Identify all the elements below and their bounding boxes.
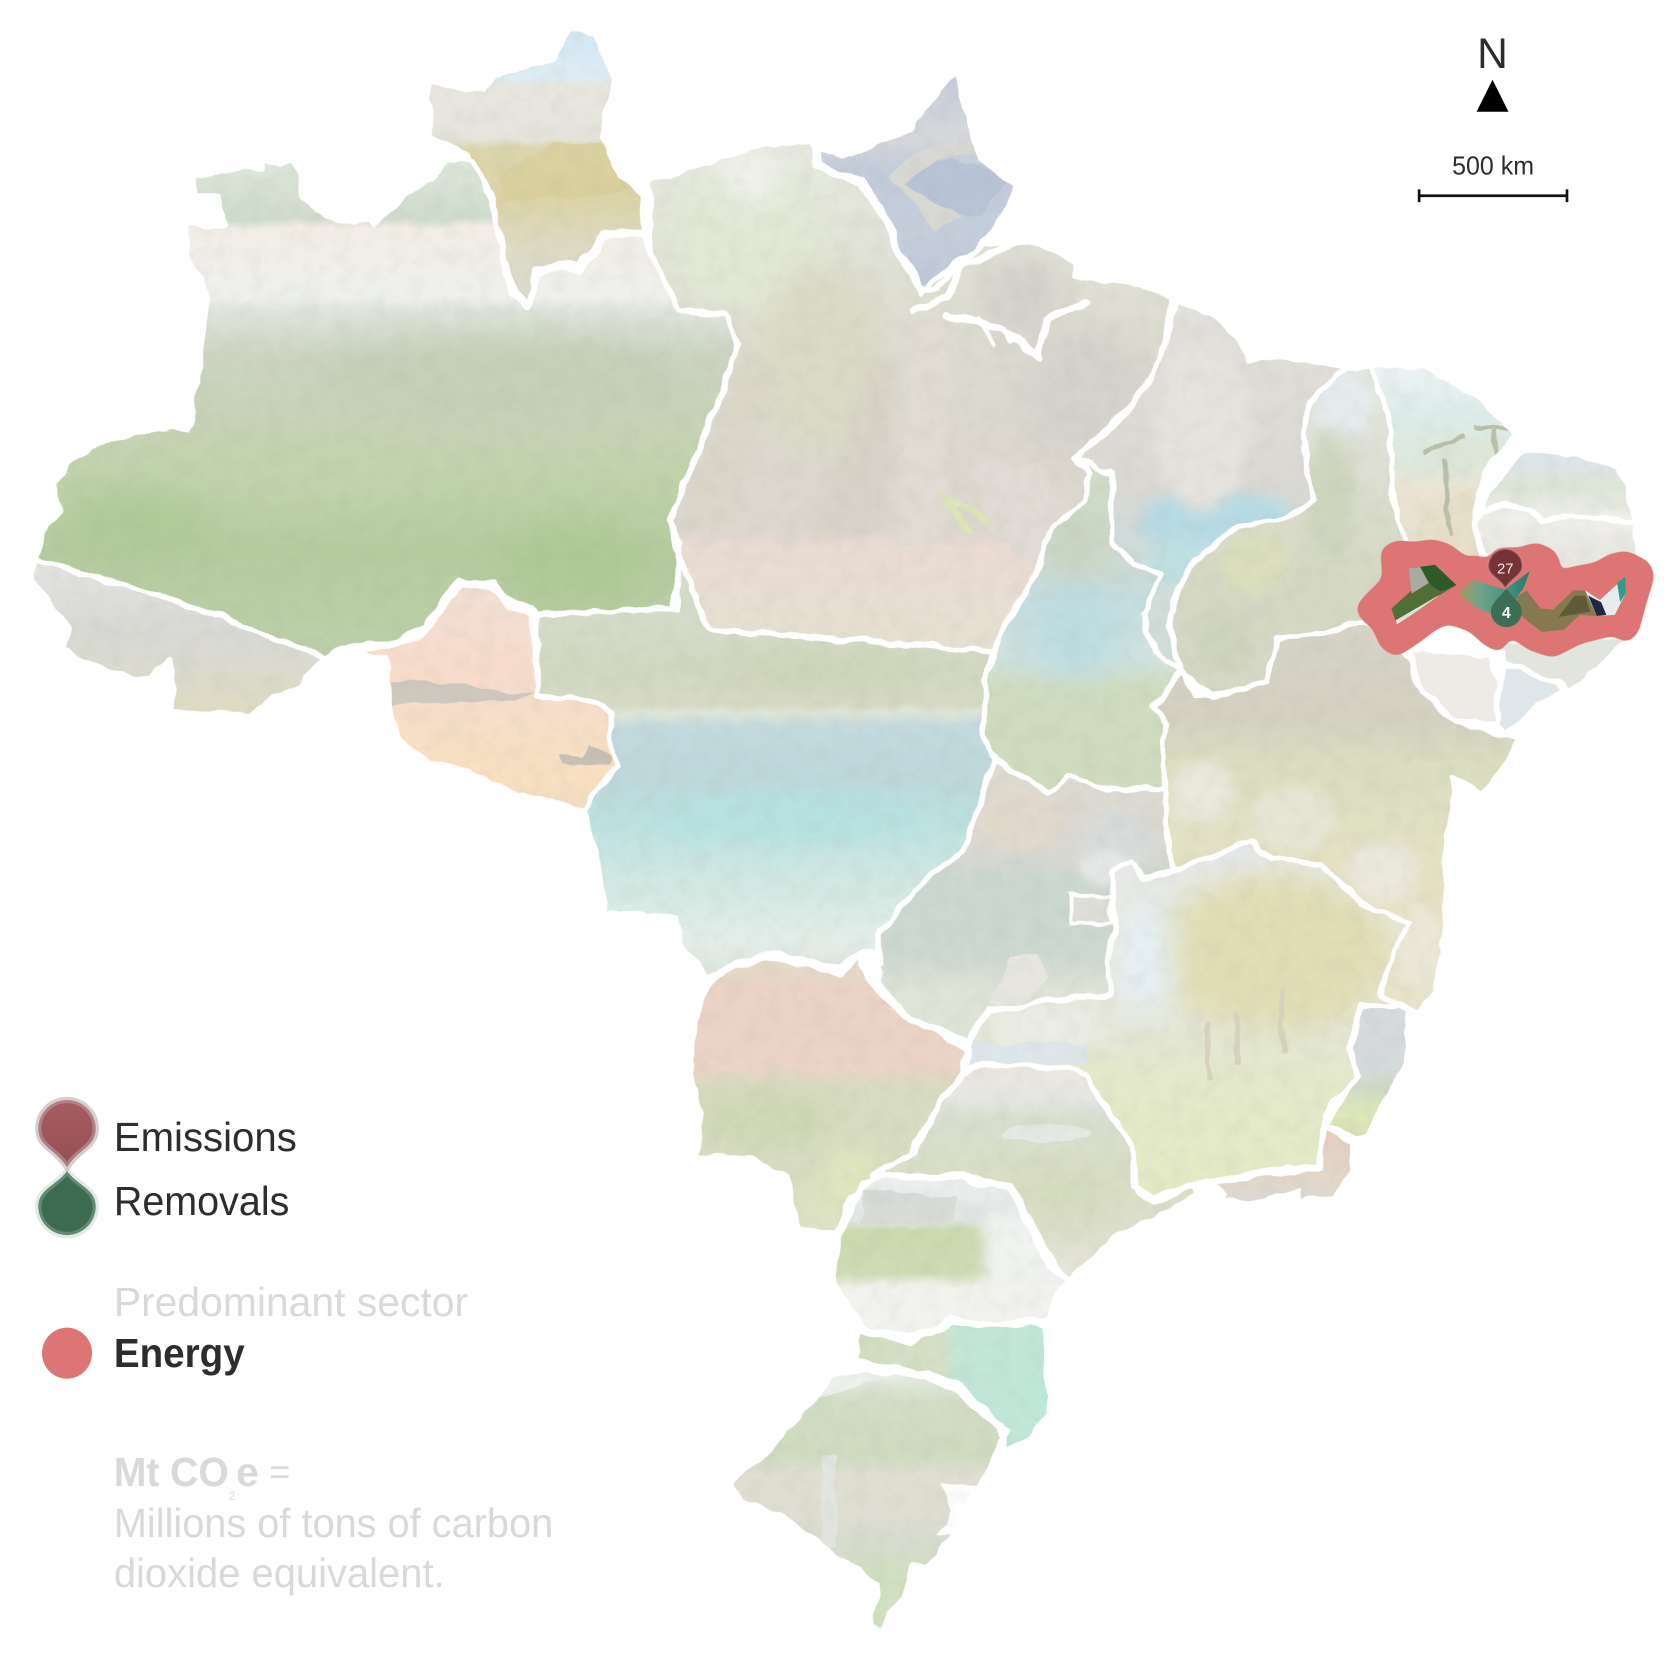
- state: Goias: [878, 761, 1176, 1043]
- N label: N: [1477, 30, 1508, 78]
- state: Paraiba coast: [1500, 638, 1628, 694]
- state: Amapa: [817, 71, 1016, 289]
- energy sector halo: [1358, 541, 1652, 655]
- unit term: 2: [229, 1490, 235, 1503]
- label: Emissions: Emissions: [114, 1114, 297, 1160]
- state: Ceara: [1374, 367, 1512, 556]
- state: Pernambuco: [1410, 649, 1500, 723]
- pin: removals 4: [1491, 588, 1522, 627]
- unit note: [114, 1449, 553, 1596]
- legend: predominant sector: [42, 1279, 468, 1379]
- unit term: =: [269, 1451, 290, 1492]
- federal district: [1071, 896, 1112, 923]
- state: Rio de Janeiro: [1213, 1128, 1353, 1202]
- icon: removals drop: [38, 1171, 96, 1235]
- state: Pernambuco highlighted in Energy red: [1358, 541, 1652, 655]
- photo fragment: teal water: [1458, 571, 1530, 615]
- state: Minas Gerais: [966, 843, 1410, 1197]
- state: Rondonia: [366, 587, 616, 808]
- state: Santa Catarina: [856, 1324, 1048, 1452]
- state: Maranhao: [1074, 300, 1346, 670]
- state: Bahia: [1154, 622, 1521, 1013]
- unit explanation line 2: dioxide equivalent.: [114, 1550, 445, 1596]
- icon: energy dot: [42, 1328, 92, 1379]
- unit term: Mt CO: [114, 1449, 229, 1495]
- state: Espirito Santo: [1324, 1005, 1410, 1138]
- label: Removals: Removals: [114, 1178, 289, 1224]
- state: Piaui: [1170, 367, 1404, 697]
- state: Tocantins: [984, 457, 1181, 793]
- scale label: 500 km: [1452, 152, 1534, 180]
- state: Parana: [832, 1176, 1069, 1338]
- label: Energy: Energy: [114, 1330, 245, 1376]
- state: Mato Grosso: [537, 559, 995, 979]
- pin: emissions 27: [1488, 549, 1522, 588]
- arrow triangle: [1477, 80, 1508, 112]
- pin: removals 4: 4: [1502, 605, 1511, 622]
- unit term: [114, 1449, 290, 1503]
- legend: emissions and removals: [38, 1100, 297, 1235]
- scale bar: [1419, 152, 1567, 202]
- north arrow: [1477, 30, 1508, 112]
- state: Roraima: [426, 30, 644, 303]
- photo fragment: town: [1391, 565, 1456, 624]
- state: Sao Paulo: [872, 1064, 1197, 1282]
- unit explanation line 1: Millions of tons of carbon: [114, 1500, 553, 1546]
- unit term: e: [236, 1449, 259, 1495]
- icon: emissions drop: [38, 1100, 96, 1167]
- state: Acre: [32, 559, 324, 715]
- state: Rio Grande do Sul: [729, 1369, 1005, 1633]
- state: Sergipe and Alagoas: [1495, 665, 1564, 734]
- heading: predominant sector: Predominant sector: [114, 1279, 468, 1325]
- state: Rio Grande do Norte and Paraiba: [1479, 452, 1638, 574]
- photo fragment: surf: [1585, 577, 1626, 616]
- state: Mato Grosso do Sul: [689, 957, 966, 1234]
- pin: emissions 27: 27: [1497, 561, 1514, 577]
- texture overlay: [204, 38, 1338, 1498]
- photo fragment: mountain: [1517, 590, 1597, 632]
- scale line: [1419, 189, 1567, 202]
- state: Para: [649, 141, 1170, 651]
- state: Amazonas: [34, 157, 738, 659]
